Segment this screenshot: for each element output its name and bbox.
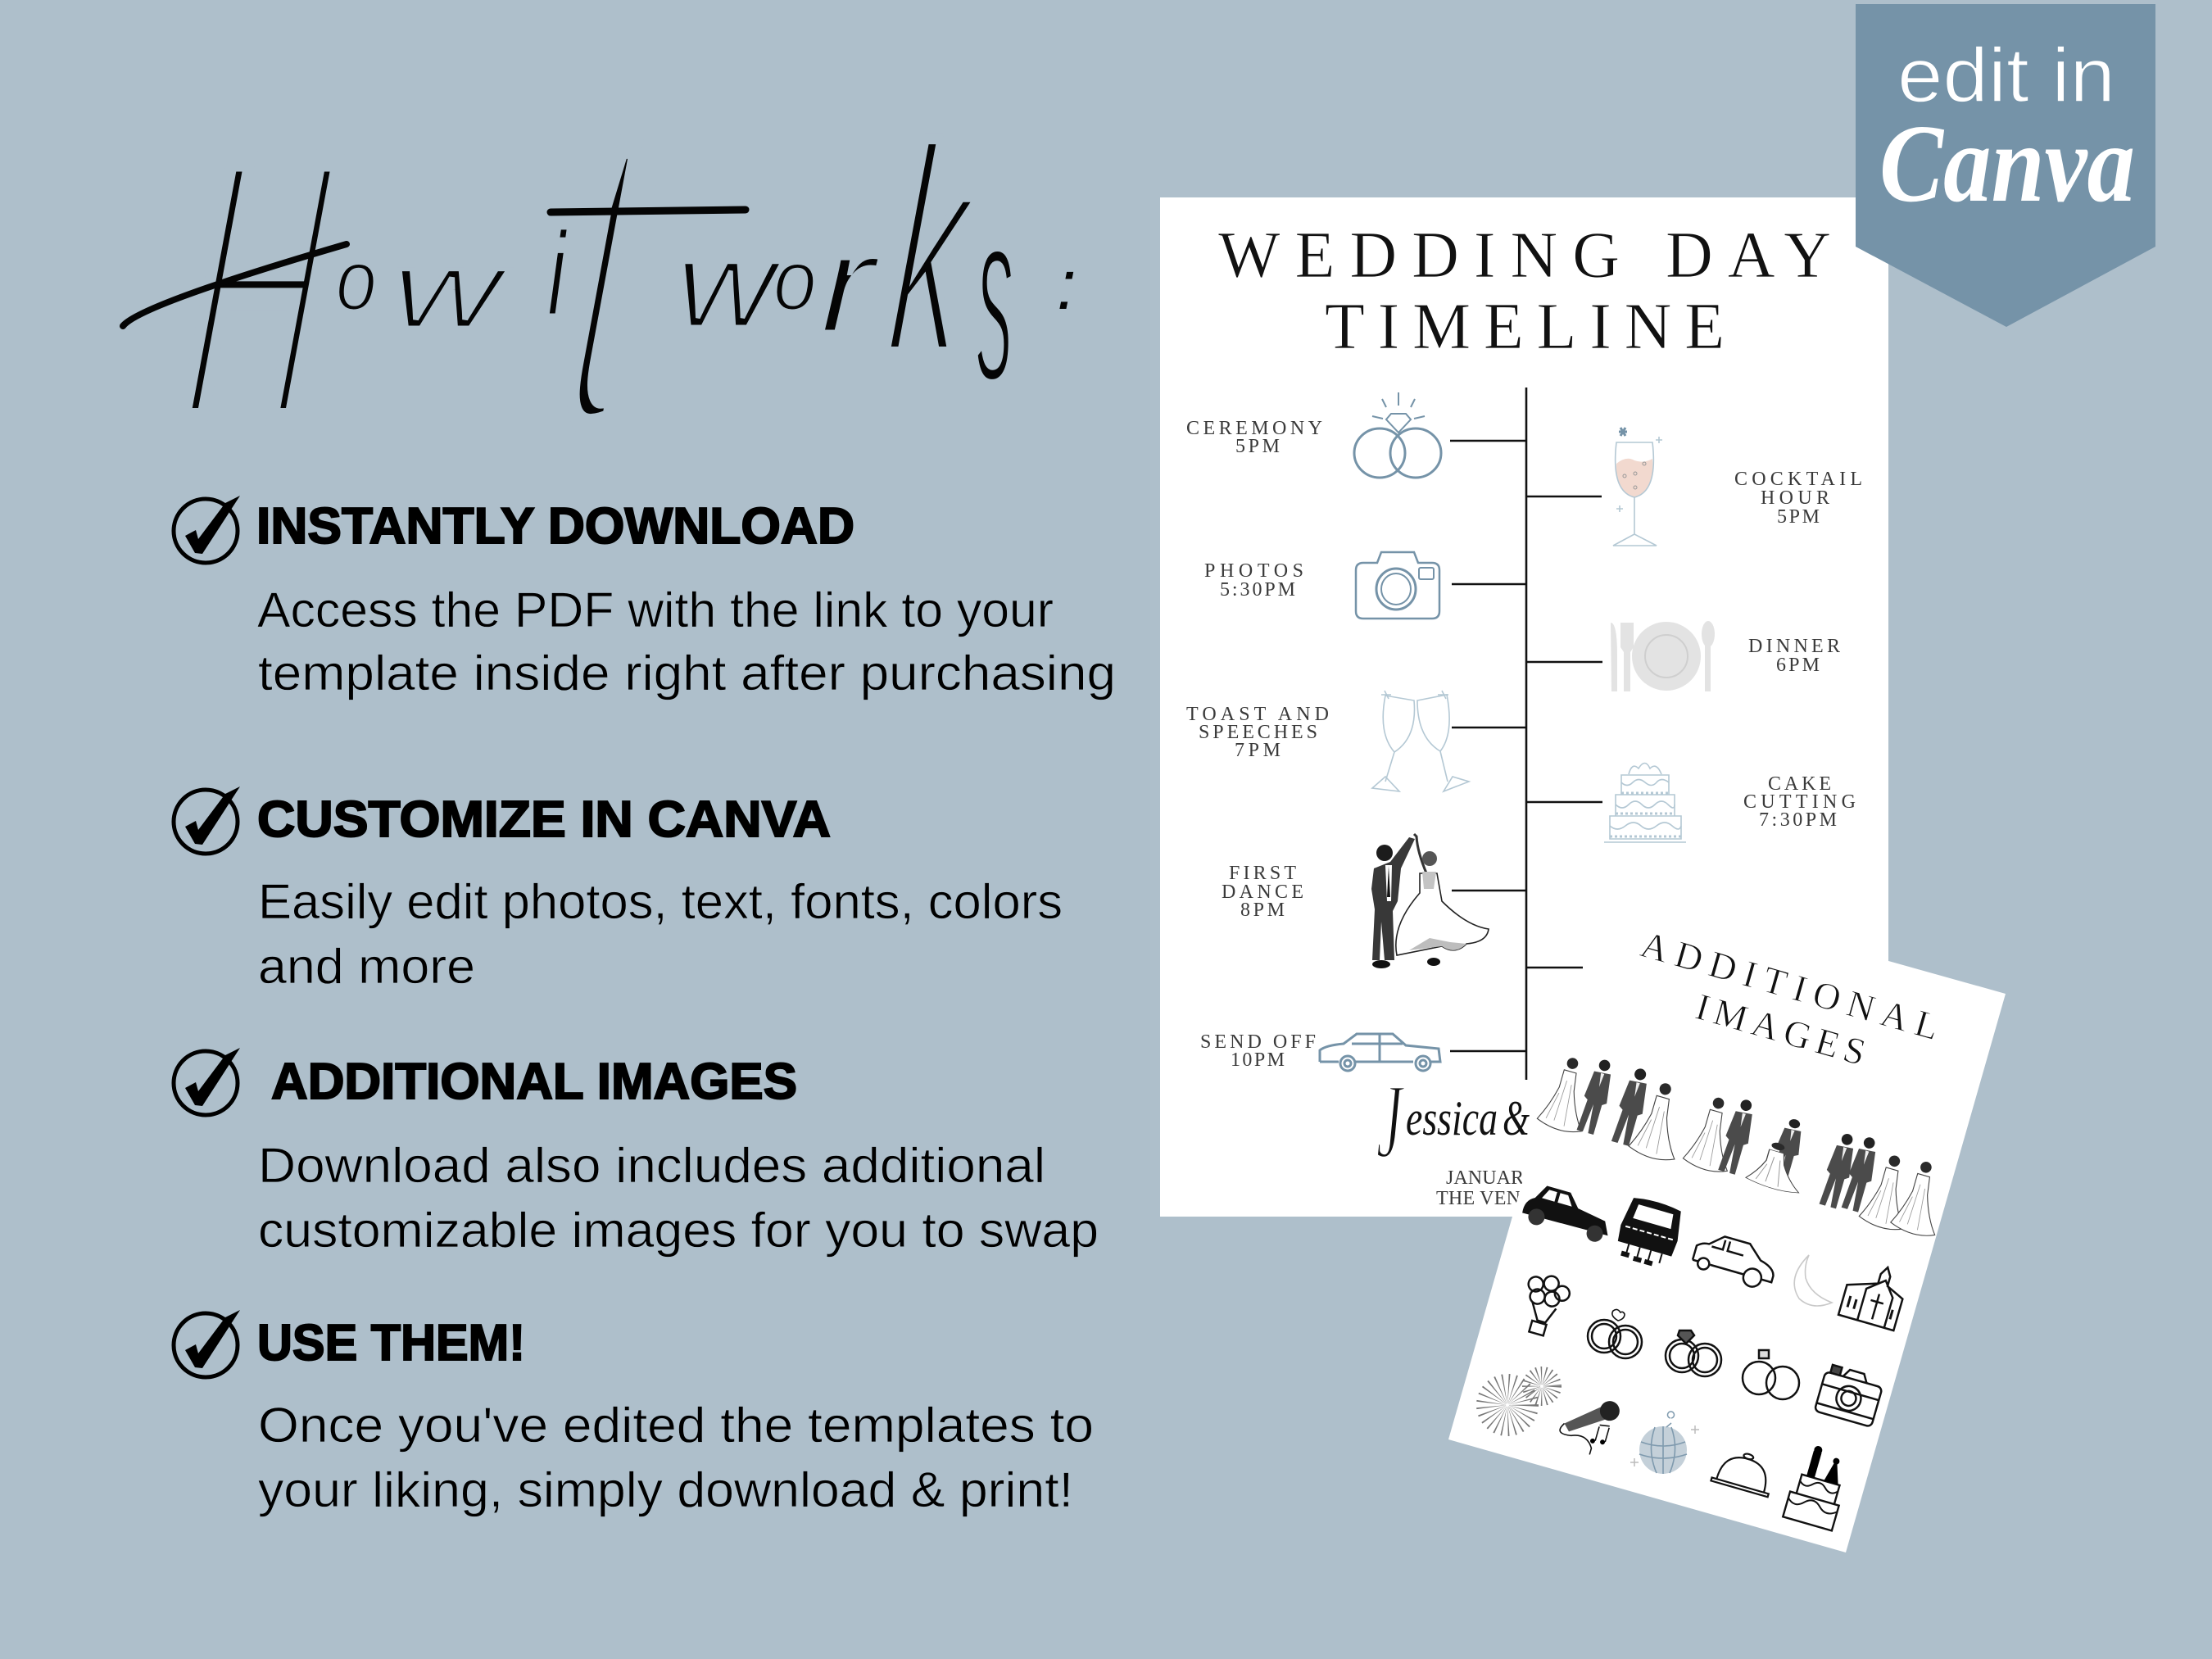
signature names: J	[1376, 1063, 1405, 1181]
additional images heading: ADDITIONAL	[1636, 923, 1944, 1048]
text 2: and more	[258, 939, 475, 994]
date and venue: JANUAR	[1446, 1167, 1524, 1189]
icon: camera	[1356, 552, 1439, 619]
text 1: Access the PDF with the link to your	[257, 582, 1054, 637]
icon: rings one	[1588, 1309, 1642, 1358]
icon: vintage car	[1320, 1034, 1440, 1071]
badge text: Canva: Canva	[1879, 102, 2135, 225]
date and venue: THE VEN	[1436, 1188, 1521, 1209]
text 4	[258, 1398, 1094, 1517]
label: first dance: FIRST	[1229, 863, 1296, 884]
badge: edit in canva	[1856, 4, 2155, 327]
couple 4	[1745, 1111, 1818, 1196]
label: cocktail hour: HOUR	[1761, 487, 1829, 509]
step 2: customize in canva	[174, 786, 1063, 994]
icon: microphone	[1556, 1389, 1622, 1459]
title: How it works: o	[336, 232, 377, 329]
icon: champagne flutes	[1372, 691, 1469, 791]
icon: church	[1838, 1258, 1910, 1330]
icon: just married car	[1612, 1194, 1686, 1271]
label: dinner: DINNER	[1748, 636, 1840, 657]
icon: check 3	[174, 1048, 240, 1115]
panel: additional images	[1448, 882, 2006, 1552]
text 4: Once you've edited the templates to	[258, 1398, 1094, 1453]
label: cocktail hour	[1734, 469, 1862, 528]
title: How it works: w	[392, 228, 510, 351]
heading 1: INSTANTLY DOWNLOAD	[256, 498, 854, 555]
heading 2: CUSTOMIZE IN CANVA	[257, 791, 831, 848]
icon: plate and cutlery	[1611, 621, 1715, 691]
label: dinner	[1748, 636, 1840, 676]
icon: wine glass	[1613, 428, 1662, 546]
text 4: your liking, simply download & print!	[258, 1462, 1073, 1517]
label: cocktail hour: COCKTAIL	[1734, 469, 1862, 490]
label: cake cutting: CAKE	[1768, 773, 1831, 795]
label: first dance: DANCE	[1222, 882, 1303, 903]
icon: disco ball	[1630, 1412, 1699, 1474]
label: send off	[1200, 1031, 1316, 1071]
label: dinner: 6PM	[1776, 655, 1820, 676]
label: cake cutting: CUTTING	[1743, 791, 1856, 813]
couple 3	[1682, 1087, 1760, 1179]
label: ceremony: 5PM	[1235, 436, 1280, 457]
label: toast and speeches: 7PM	[1235, 740, 1281, 761]
label: ceremony	[1186, 418, 1322, 457]
icon: rings two	[1666, 1330, 1721, 1376]
timeline heading: WEDDING DAY	[1218, 220, 1831, 292]
icon: black car	[1520, 1181, 1616, 1245]
step 4: use them	[174, 1310, 1094, 1517]
timeline axis and branches	[1450, 388, 1602, 1080]
title: How it works: :	[1057, 247, 1077, 324]
title: How it works: H	[171, 79, 347, 500]
timeline heading	[1218, 220, 1831, 363]
timeline heading: TIMELINE	[1325, 291, 1725, 363]
label: cake cutting: 7:30PM	[1759, 809, 1837, 831]
text 2	[258, 874, 1063, 994]
title: How it works: w	[676, 215, 783, 353]
icon: crescent moon	[1794, 1255, 1832, 1306]
icon: check 4	[174, 1310, 240, 1377]
icon: outline car	[1690, 1230, 1780, 1292]
text 3: Download also includes additional	[258, 1138, 1045, 1193]
label: send off: 10PM	[1231, 1049, 1285, 1071]
icon: cloche	[1711, 1446, 1778, 1497]
icon: check 2	[174, 786, 240, 854]
icon: rings three	[1743, 1350, 1799, 1399]
icon: wedding cake	[1604, 764, 1686, 842]
illustration: first dance couple	[1371, 834, 1489, 968]
title: How it works: r	[819, 206, 881, 361]
signature names: essica	[1406, 1091, 1498, 1145]
label: ceremony: CEREMONY	[1186, 418, 1322, 439]
additional images heading: IMAGES	[1691, 986, 1870, 1073]
title: How it works: o	[773, 233, 817, 329]
date and venue	[1436, 1167, 1524, 1209]
text 3: customizable images for you to swap	[258, 1203, 1099, 1258]
label: send off: SEND OFF	[1200, 1031, 1316, 1053]
label: toast and speeches	[1186, 704, 1329, 761]
signature names	[1376, 1063, 1530, 1181]
text 2: Easily edit photos, text, fonts, colors	[258, 874, 1063, 929]
title: How it works: i	[547, 207, 568, 340]
step 1: instantly download	[174, 496, 1116, 700]
couple 6	[1858, 1148, 1954, 1242]
badge text: edit in: edit in	[1897, 32, 2115, 118]
signature names: &	[1503, 1091, 1530, 1145]
label: toast and speeches: SPEECHES	[1199, 722, 1317, 743]
title: How it works: k	[879, 87, 989, 415]
text 3	[258, 1138, 1099, 1258]
text 1	[257, 582, 1116, 700]
label: first dance	[1222, 863, 1303, 921]
label: photos: 5:30PM	[1220, 579, 1295, 601]
title: How it works: t	[553, 38, 662, 513]
label: cake cutting	[1743, 773, 1856, 831]
heading 4: USE THEM!	[257, 1315, 525, 1371]
icon: wedding rings	[1354, 392, 1441, 478]
step 3: additional images	[174, 1048, 1099, 1258]
panel: wedding day timeline	[1160, 197, 1888, 1217]
text 1: template inside right after purchasing	[258, 646, 1116, 700]
label: photos	[1204, 560, 1303, 601]
heading 3: ADDITIONAL IMAGES	[271, 1054, 797, 1110]
icon: check 1	[174, 496, 240, 563]
couple 1	[1536, 1046, 1618, 1140]
label: first dance: 8PM	[1240, 900, 1285, 921]
couple 5	[1817, 1128, 1883, 1216]
title: How it works: s	[977, 158, 1013, 433]
label: photos: PHOTOS	[1204, 560, 1303, 582]
icon: fireworks	[1491, 1376, 1552, 1421]
title: How it works	[123, 38, 1077, 513]
label: cocktail hour: 5PM	[1777, 506, 1820, 528]
icon: tiered cake with topper	[1783, 1442, 1853, 1530]
icon: outline camera	[1815, 1363, 1884, 1427]
icon: bouquet	[1516, 1271, 1573, 1339]
label: toast and speeches: TOAST AND	[1186, 704, 1329, 725]
couple 2	[1608, 1066, 1696, 1164]
